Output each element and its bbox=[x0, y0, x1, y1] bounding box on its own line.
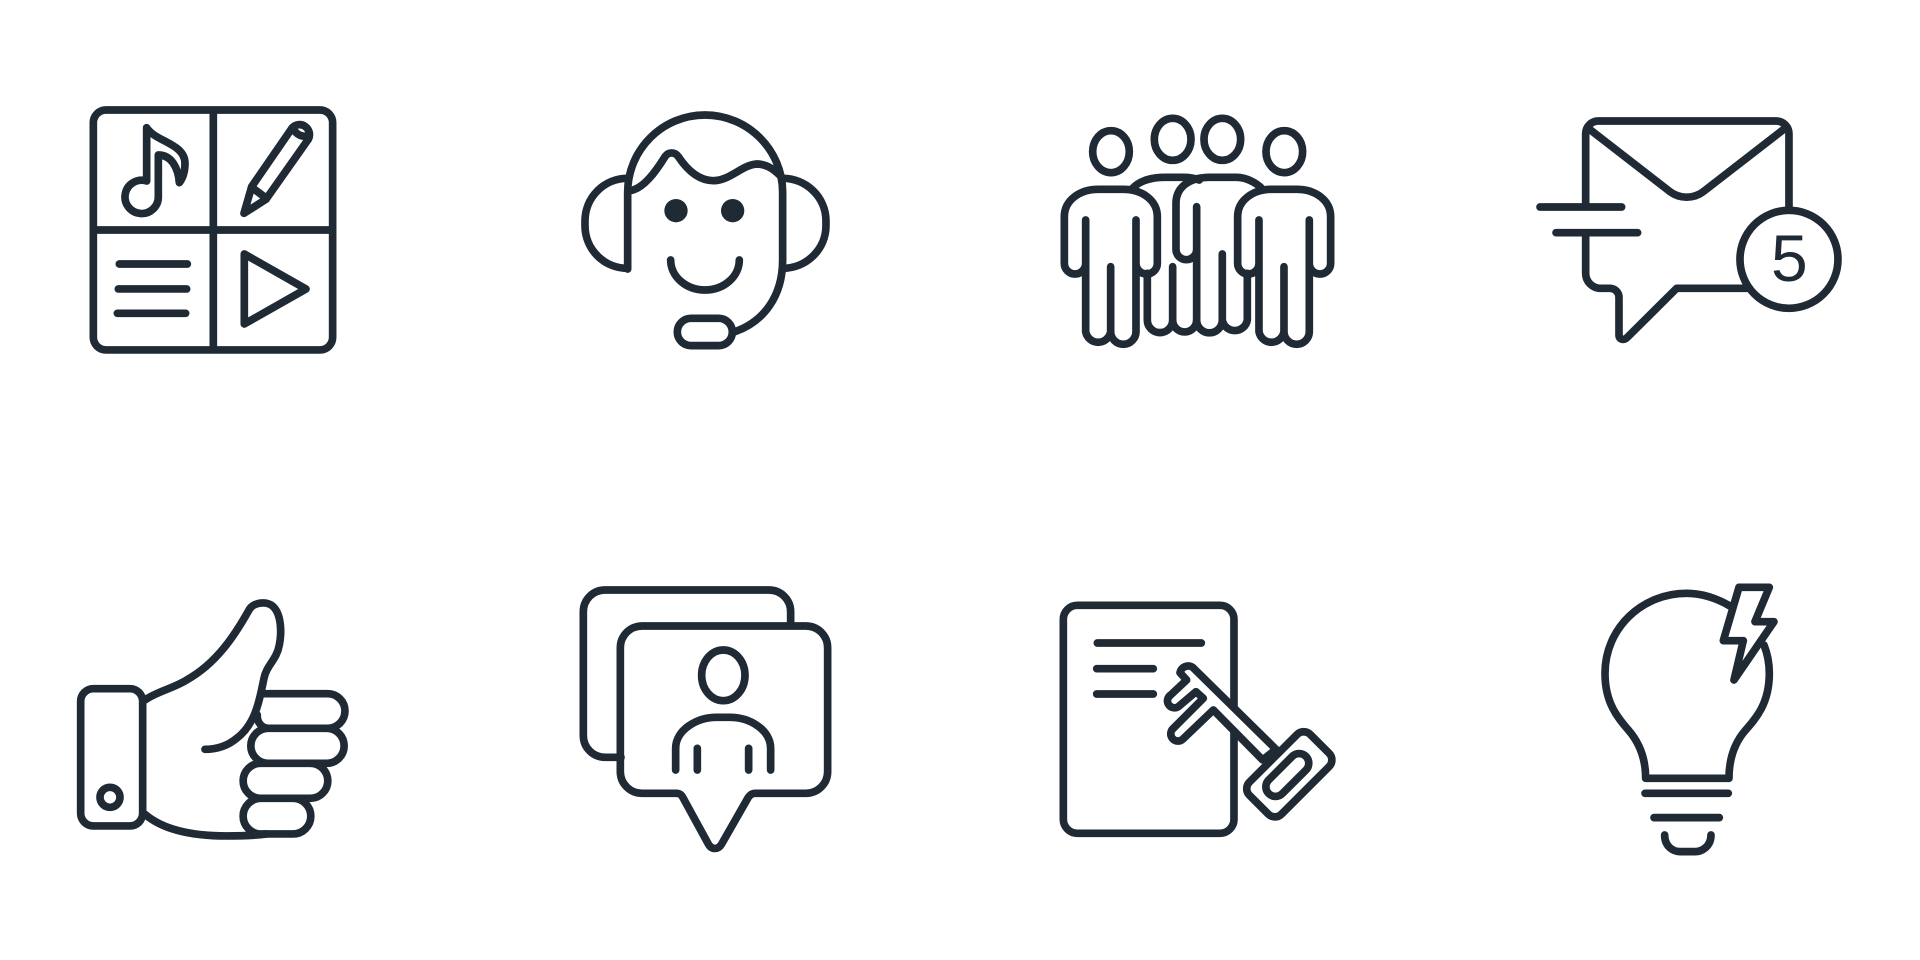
document bbox=[1063, 605, 1234, 833]
lightning bolt bbox=[1723, 587, 1774, 680]
back bubble bbox=[583, 590, 791, 757]
key handle slot bbox=[1262, 750, 1313, 800]
fingers bbox=[243, 694, 345, 834]
icon: document with key bbox=[1063, 605, 1336, 833]
badge number: 5 bbox=[1771, 221, 1808, 295]
icon: thumbs up bbox=[81, 603, 345, 836]
envelope flap bbox=[1588, 128, 1785, 197]
icon: media grid bbox=[93, 110, 333, 350]
microphone bbox=[677, 318, 732, 346]
front bubble bbox=[620, 626, 828, 848]
document text lines bbox=[1097, 643, 1201, 694]
person head bbox=[702, 650, 745, 701]
head and microphone arm bbox=[628, 115, 783, 332]
icon: light bulb with lightning bolt bbox=[1605, 587, 1774, 852]
play triangle bbox=[244, 254, 306, 324]
eyes bbox=[664, 199, 744, 222]
music note bbox=[125, 128, 185, 214]
pencil bbox=[244, 125, 309, 213]
text lines bbox=[117, 264, 187, 313]
icon: support agent with headset bbox=[585, 115, 826, 346]
icon: profile speech bubbles bbox=[583, 590, 828, 848]
bulb outline bbox=[1605, 593, 1769, 778]
base lines bbox=[1645, 793, 1728, 818]
icon: message envelope with badge 5 bbox=[1540, 121, 1838, 339]
wrist underside bbox=[145, 814, 267, 836]
heads bbox=[1093, 118, 1303, 173]
front right person bbox=[1238, 189, 1331, 344]
smile bbox=[671, 260, 739, 290]
hair bbox=[628, 153, 783, 191]
key handle bbox=[1243, 728, 1336, 821]
envelope top bbox=[1586, 121, 1789, 208]
front left person bbox=[1064, 189, 1157, 344]
icon: group of four people bbox=[1064, 118, 1331, 344]
cuff bbox=[81, 689, 143, 826]
grid frame bbox=[93, 110, 333, 350]
socket bbox=[1665, 835, 1711, 852]
key blade bbox=[1168, 666, 1276, 760]
speed lines bbox=[1540, 207, 1638, 233]
person shoulders bbox=[676, 717, 771, 770]
speech tail bbox=[1586, 233, 1747, 339]
cuff button bbox=[100, 787, 120, 807]
rear left person bbox=[1133, 177, 1199, 333]
thumb and palm bbox=[145, 603, 281, 749]
badge circle bbox=[1740, 210, 1838, 308]
rear right person bbox=[1176, 177, 1262, 333]
ear cups bbox=[585, 178, 826, 268]
